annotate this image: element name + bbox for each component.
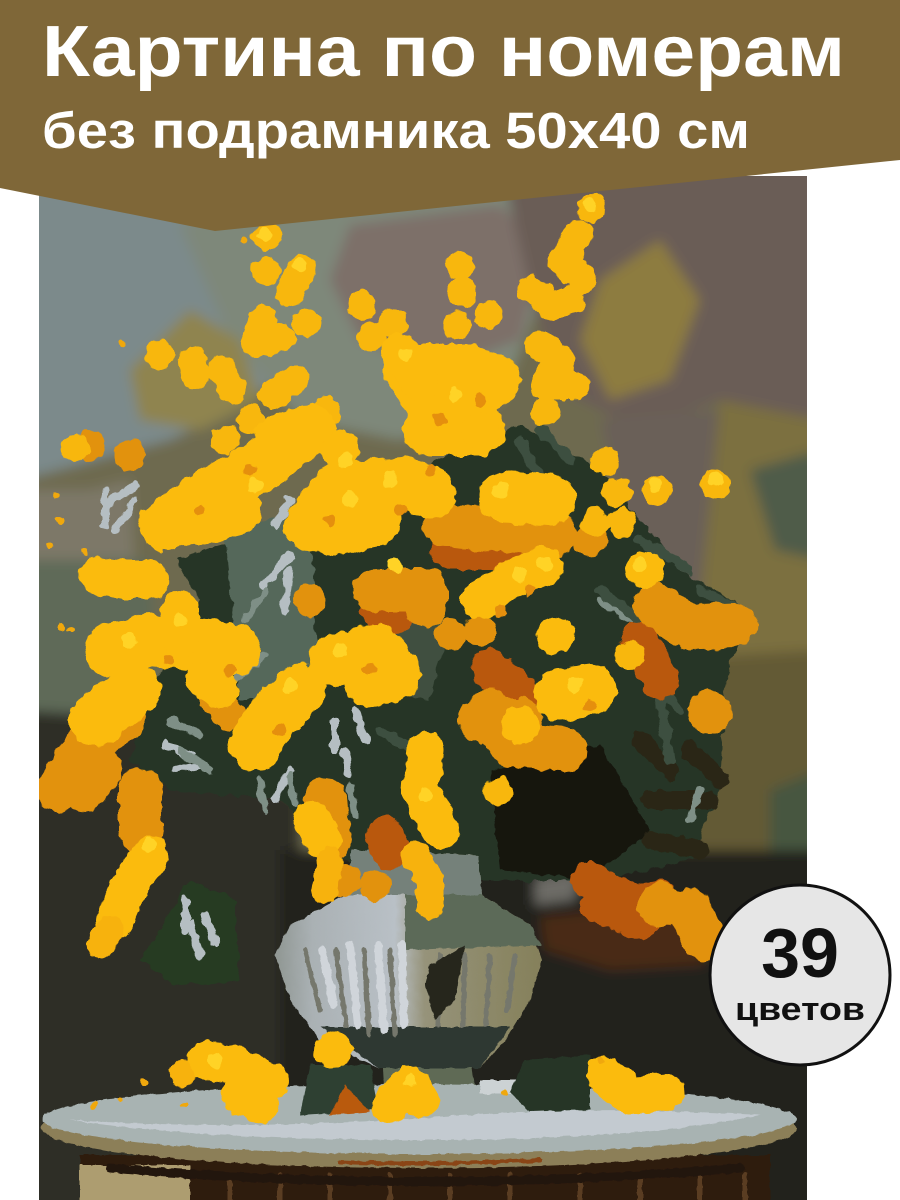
yellow mimosa blossoms [75, 208, 716, 1105]
table [41, 1055, 797, 1200]
painting background [20, 160, 820, 1200]
deep orange blossoms [380, 550, 660, 920]
badge: 39 colours: 39 [761, 914, 839, 992]
dark foliage mass [130, 425, 750, 985]
top banner [0, 0, 900, 231]
orange blossoms [58, 445, 735, 940]
badge: 39 colours: цветов [735, 991, 865, 1027]
painting [20, 160, 820, 1200]
subtitle: без подрамника 50х40 см [42, 102, 750, 159]
vase [275, 850, 542, 1106]
badge: 39 colours [710, 885, 890, 1065]
vase and table [41, 850, 797, 1200]
light highlights, shaded spots and stray petals [50, 205, 716, 1105]
title: Картина по номерам [42, 12, 845, 92]
foliage [105, 425, 750, 985]
blossoms [50, 205, 735, 1105]
grey-green leaves [105, 430, 740, 955]
